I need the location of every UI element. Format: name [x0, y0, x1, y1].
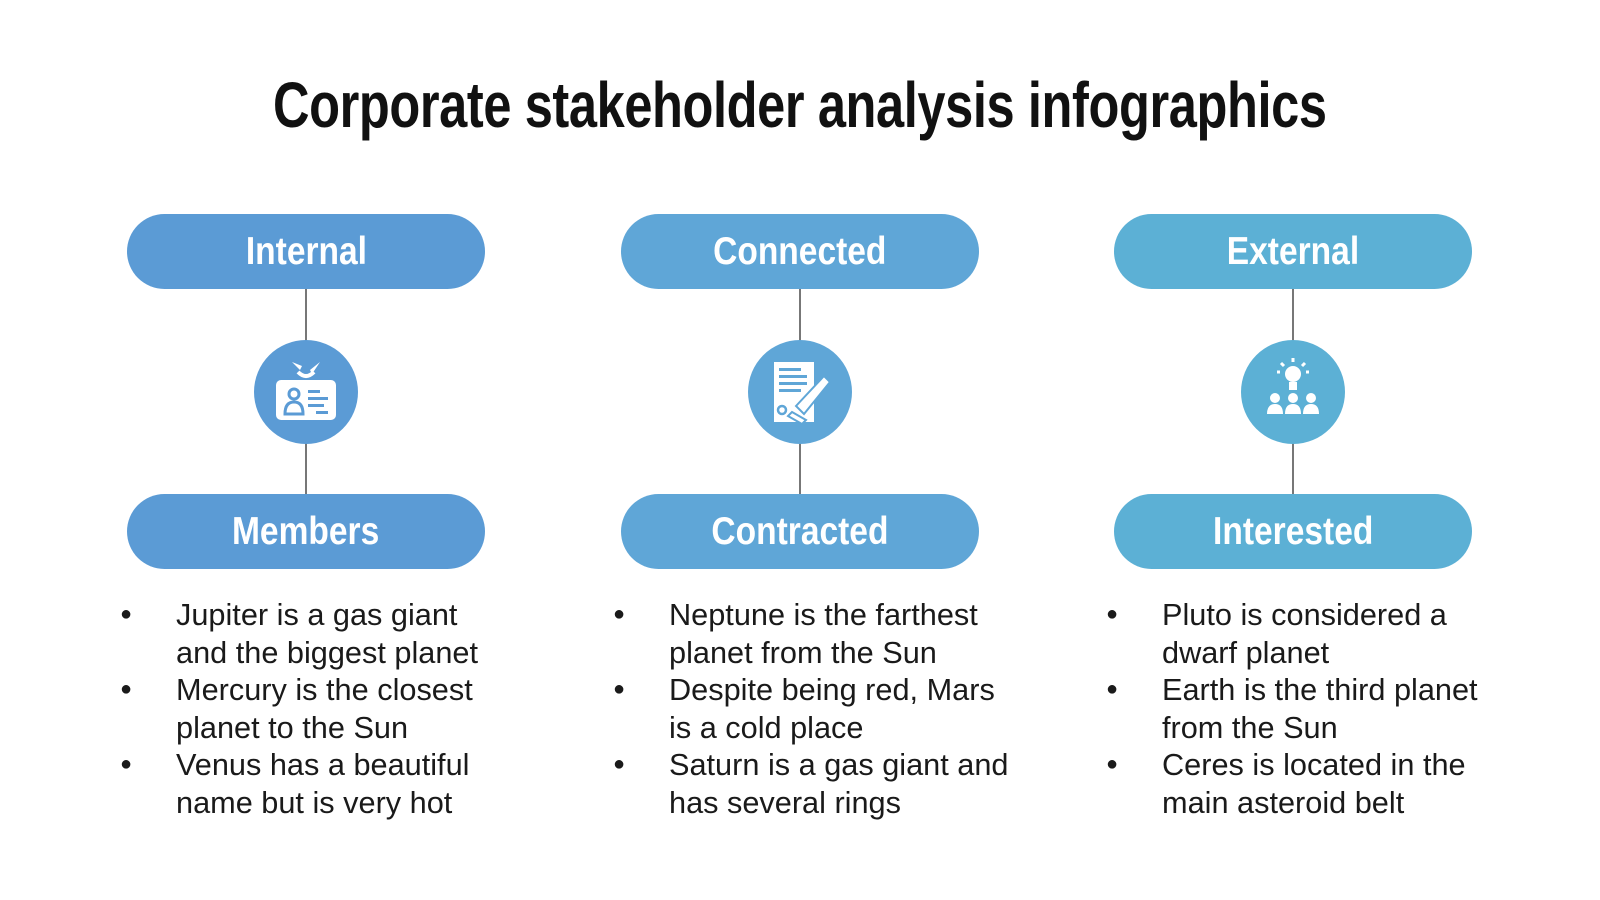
- list: connected: [614, 597, 1008, 820]
- pill: Interested: Interested: [1213, 510, 1373, 553]
- icon: contract: [748, 340, 852, 444]
- pill: Members: Members: [232, 510, 380, 553]
- list: internal: [122, 597, 478, 820]
- pill: Members: [127, 494, 485, 569]
- list: external: [1108, 597, 1478, 820]
- pill: Internal: [127, 214, 485, 289]
- list: external: Pluto is considered a: [1162, 597, 1447, 632]
- icon: people with idea: [1241, 340, 1345, 444]
- list: connected: Despite being red, Mars: [669, 672, 995, 707]
- list: external: Earth is the third planet: [1162, 672, 1478, 707]
- pill: External: [1114, 214, 1472, 289]
- list: external: from the Sun: [1162, 710, 1338, 744]
- pill: Contracted: [621, 494, 979, 569]
- title: Corporate stakeholder analysis infographics: [273, 69, 1327, 141]
- list: connected: Saturn is a gas giant and: [669, 747, 1008, 782]
- pill: Connected: Connected: [713, 230, 887, 273]
- list: internal: Venus has a beautiful: [176, 747, 469, 782]
- pill: Contracted: Contracted: [711, 510, 889, 553]
- pill: Internal: Internal: [245, 230, 367, 273]
- list: internal: Jupiter is a gas giant: [176, 597, 457, 632]
- list: internal: name but is very hot: [176, 784, 452, 820]
- list: internal: Mercury is the closest: [176, 672, 473, 707]
- list: connected: planet from the Sun: [669, 634, 937, 670]
- icon: id badge: [254, 340, 358, 444]
- list: internal: planet to the Sun: [176, 710, 408, 744]
- pill: External: External: [1227, 230, 1359, 273]
- pill: Connected: [621, 214, 979, 289]
- list: external: main asteroid belt: [1162, 784, 1404, 820]
- list: internal: and the biggest planet: [176, 634, 478, 670]
- pill: Interested: [1114, 494, 1472, 569]
- list: connected: Neptune is the farthest: [669, 597, 978, 632]
- list: connected: is a cold place: [669, 710, 863, 744]
- list: connected: has several rings: [669, 784, 901, 820]
- list: external: dwarf planet: [1162, 634, 1329, 670]
- list: external: Ceres is located in the: [1162, 747, 1466, 782]
